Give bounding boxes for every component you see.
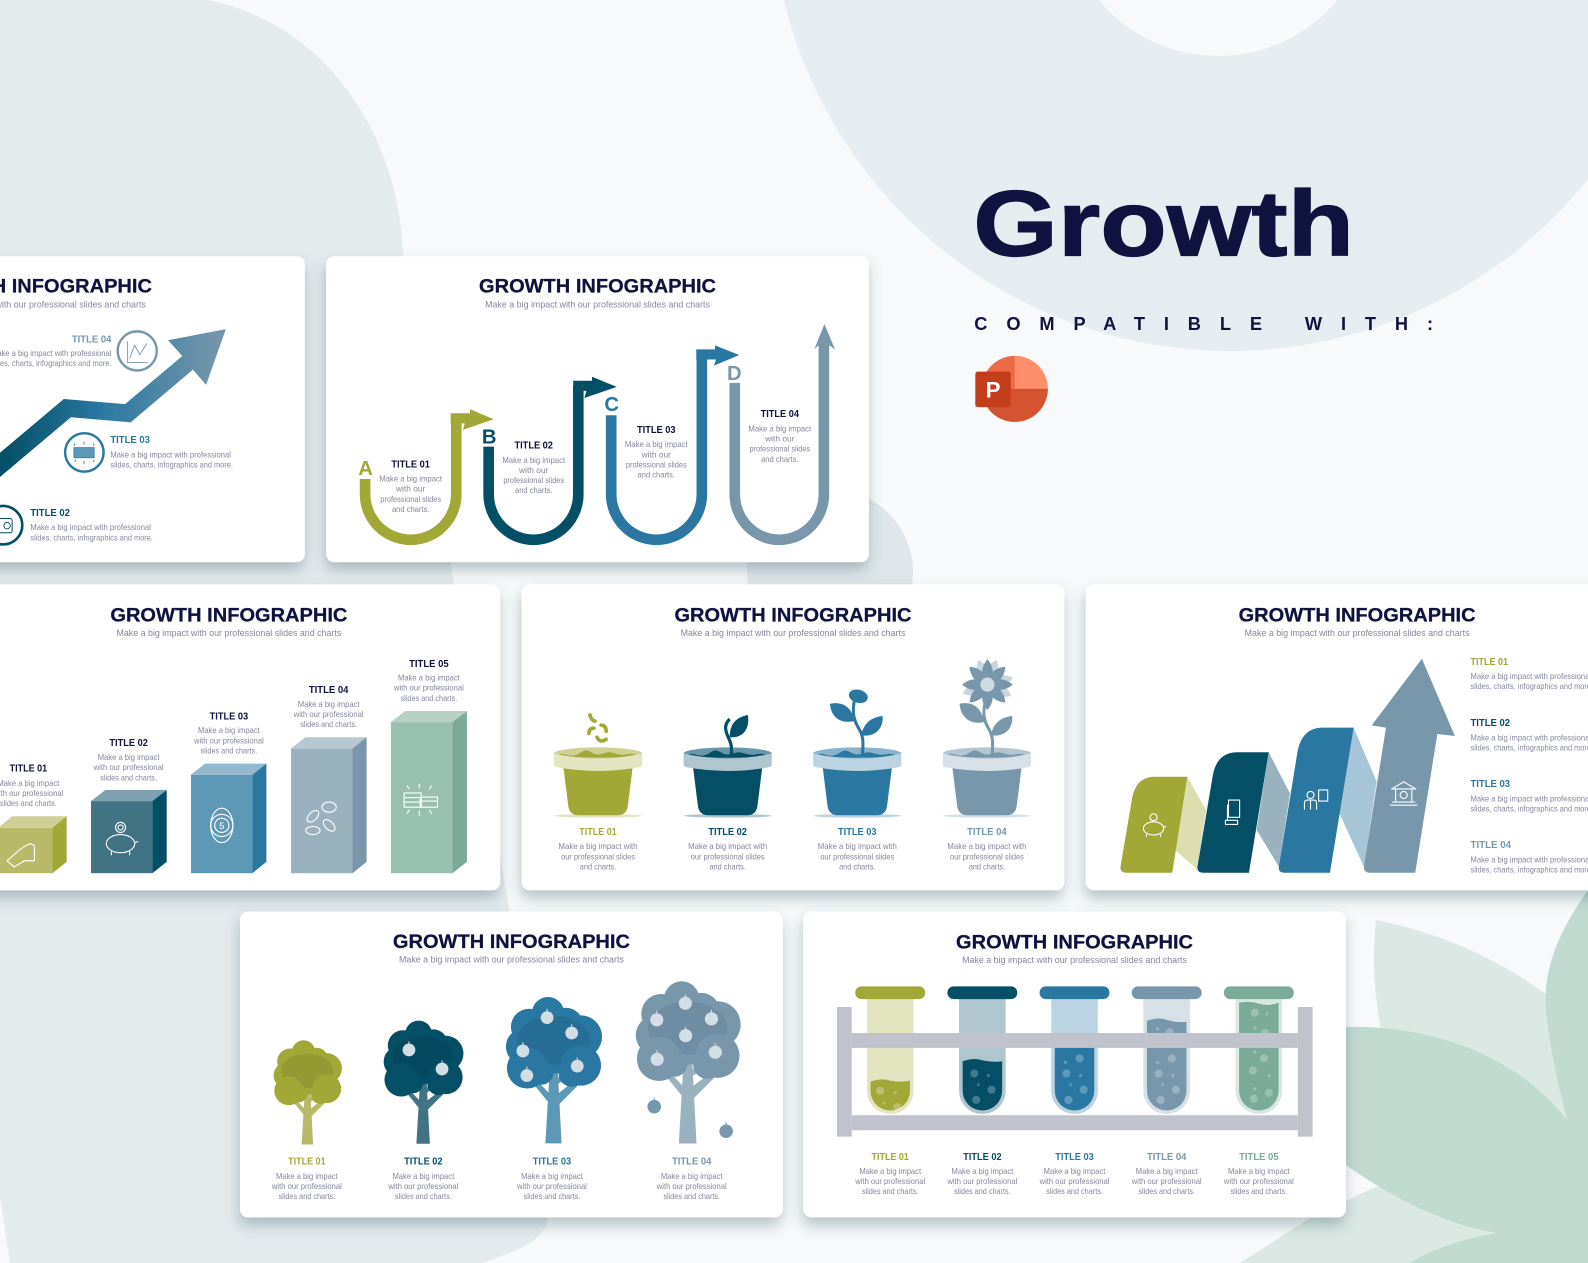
slide heading: GROWTH INFOGRAPHIC [479,277,716,298]
text: title 03: TITLE 03 [637,425,676,436]
text: title 02: TITLE 02 [514,441,553,452]
text: title 04: TITLE 04 [967,827,1007,838]
text: title 04: and charts. [969,862,1005,871]
text: title 03: Make a big impact [625,440,688,449]
text: title 02: slides and charts. [395,1192,452,1201]
text: title 04: TITLE 04 [1471,840,1511,851]
text: title 04: Make a big impact [298,700,360,709]
text: title 02: TITLE 02 [404,1157,443,1168]
text: title 03: with our professional [193,736,264,745]
text: title 02: Make a big impact [502,456,566,465]
text: title 01: slides and charts. [862,1187,919,1196]
text: title 02: with our professional [93,763,164,772]
heading: Growth: Growth [973,172,1354,276]
item: title 03: Make a big impact with professional [110,450,231,459]
panel: U-arrows slide [326,256,869,562]
text: title 03: slides and charts. [1046,1187,1103,1196]
text: title 01: with our professional [854,1177,925,1186]
text: title 04: Make a big impact [1136,1167,1198,1176]
arrow C [604,345,739,540]
text: title 03: TITLE 03 [838,827,877,838]
arrow A: A [358,458,373,480]
text: title 02: TITLE 02 [708,827,747,838]
text: title 02: TITLE 02 [1471,718,1510,729]
text: title 02: with our professional [946,1177,1018,1186]
text: title 02 [387,1157,458,1201]
tree 02 [384,1021,463,1144]
text: title 02 [1471,718,1588,752]
text: title 04 [748,409,812,464]
text: title 01: TITLE 01 [1471,657,1508,668]
text: title 02: TITLE 02 [963,1152,1002,1163]
slide subheading: Make a big impact with our professional slides and charts [1245,628,1470,639]
text: title 01: TITLE 01 [871,1152,909,1163]
ribbon folds [1175,728,1377,872]
text: title 01 [379,459,443,514]
text: title 01 [559,827,638,871]
text: title 03: TITLE 03 [533,1157,572,1168]
icon: presenter [1304,790,1328,809]
bar 03 [191,764,266,873]
text: title 04: and charts. [761,455,799,464]
tube 01 [855,986,925,1114]
tube 04 [1132,986,1202,1114]
text: title 04: with our professional [1131,1177,1202,1186]
icon: coin stack: 5 [219,821,224,831]
slide heading: GROWTH INFOGRAPHIC [674,605,912,626]
text: title 04: TITLE 04 [309,685,349,696]
pot 03: seedling [813,687,901,818]
text: title 04 [656,1157,727,1201]
text: title 04: Make a big impact with [947,842,1026,851]
text: title 02: professional slides [503,476,564,485]
text: title 01: Make a big impact with [559,842,638,851]
text: title 05: TITLE 05 [409,659,449,670]
text: title 03: Make a big impact with [818,842,897,851]
arrow B: B [482,427,496,449]
item: title 03 [65,433,233,472]
text: title 03: slides and charts. [524,1192,580,1201]
bar 01 [0,816,67,873]
text: title 04: Make a big impact [661,1172,723,1181]
text: title 04: with our [764,435,795,444]
text: title 02 [502,441,566,495]
text: title 01: slides and charts. [279,1192,335,1201]
text: title 01: our professional slides [561,852,635,861]
icon: coins [305,802,337,835]
text: title 02: and charts. [709,862,746,871]
text: title 05: slides and charts. [401,694,457,703]
slide heading: GROWTH INFOGRAPHIC [393,932,630,953]
item: title 04: TITLE 04 [72,334,112,345]
text: title 01 [0,764,63,808]
text: title 05 [1223,1152,1294,1196]
text: title 01: and charts. [580,862,616,871]
icon: PowerPoint logo [975,356,1048,422]
text: title 02 [93,738,164,782]
text: title 01: professional slides [380,495,441,504]
text: title 03: TITLE 03 [1055,1152,1094,1163]
item: title 03: TITLE 03 [110,435,150,446]
icon: PowerPoint logo: P [986,378,1001,403]
ribbon block 01 [1120,777,1187,873]
item: title 03: slides, charts, infographics and more. [110,460,233,469]
arrow D [727,324,835,540]
text: title 03: and charts. [839,862,876,871]
text: title 01: Make a big impact [859,1167,922,1176]
text: title 02 [688,827,767,871]
text: title 01: TITLE 01 [579,827,617,838]
falling apples [648,1098,732,1138]
text: title 02: Make a big impact with [688,842,767,851]
text: title 02: with our professional [387,1182,458,1191]
text: title 05: with our professional [393,684,464,693]
background leaves [1240,890,1588,1263]
arrow B [482,377,617,540]
text: title 04: with our professional [656,1182,727,1191]
panel: rising arrow slide [0,256,305,562]
text: title 01 [854,1152,925,1196]
text: title 03: Make a big impact [521,1172,584,1181]
text: title 03 [818,827,897,871]
tube 02 [947,986,1017,1114]
slide subheading: Make a big impact with our professional slides and charts [116,628,341,639]
text: title 02: and charts. [515,486,552,495]
text: title 05: Make a big impact [1228,1167,1290,1176]
tree 04 [636,981,741,1144]
text: title 03: and charts. [638,471,675,480]
text: title 01 [271,1157,342,1201]
apples on tree 02 [403,1041,448,1075]
background blob: left [0,0,548,1263]
text: title 03: TITLE 03 [1471,779,1510,790]
text: title 01: Make a big impact [379,475,443,484]
text: title 02: with our [518,466,549,475]
text: title 03: with our [641,450,671,459]
text: title 04 [1471,840,1588,874]
slide subheading: Make a big impact with our professional slides and charts [485,299,710,310]
text: title 02: Make a big impact [951,1167,1014,1176]
bar 02 [91,790,167,873]
arrow A [358,409,494,540]
text: title 03: with our professional [1039,1177,1110,1186]
text: title 02: Make a big impact [392,1172,455,1181]
text: title 01: slides and charts. [0,799,57,808]
text: title 05: slides and charts. [1231,1187,1287,1196]
bar 04 [291,737,367,873]
tree 01 [274,1040,342,1144]
text: title 04: our professional slides [950,852,1024,861]
background circle: top small [1063,0,1373,56]
text: title 03 [625,425,688,480]
text: title 02: Make a big impact [98,753,160,762]
ribbon arrow [1364,659,1455,873]
slide heading: GROWTH INFOGRAPHIC [956,932,1193,953]
item: title 02: slides, charts, infographics and more. [30,533,153,542]
text: title 01: Make a big impact [276,1172,338,1181]
text: title 03: Make a big impact [1044,1167,1106,1176]
text: title 02: slides and charts. [100,773,157,782]
background blob: behind arrow panel [747,489,913,655]
flower head [961,658,1014,710]
slide subheading: Make a big impact with our professional slides and charts [962,955,1187,966]
panel: test tubes slide [803,911,1346,1217]
arrow: rising zigzag [0,329,226,477]
slide subheading: Make a big impact with our professional slides and charts [681,628,906,639]
text: title 05: with our professional [1223,1177,1294,1186]
tube 03 [1040,986,1109,1114]
text: title 01: TITLE 01 [10,764,47,775]
text: title 04: slides and charts. [1138,1187,1195,1196]
text: title 01: TITLE 01 [391,459,430,470]
icon: money stacks [404,784,438,815]
text: title 02: slides and charts. [954,1187,1011,1196]
arrow D: D [727,363,742,385]
text: title 02 [946,1152,1018,1196]
text: title 04: TITLE 04 [1147,1152,1187,1163]
icon: piggy bank [1143,814,1166,837]
text: title 03 [516,1157,587,1201]
text: title 04 [293,685,364,729]
background circle: top right [771,0,1588,351]
panel: folded ribbon arrow slide [1086,584,1588,890]
text: title 05 [393,659,464,703]
slide heading: GROWTH INFOGRAPHIC [1239,605,1476,626]
icon: card in hand [1225,800,1240,824]
apples on tree 03 [517,1009,583,1081]
text: title 02: our professional slides [691,852,765,861]
text: title 04 [1131,1152,1202,1196]
text: title 04 [947,827,1026,871]
text: title 04: Make a big impact [748,424,812,433]
text: title 04: with our professional [293,710,364,719]
pot 02: sprout [684,715,772,818]
text: title 04: TITLE 04 [672,1157,712,1168]
text: title 03 [1471,779,1588,814]
panel: trees slide [240,911,783,1217]
icon: bank building [1391,782,1417,805]
text: title 01: and charts. [392,505,429,514]
text: title 03: TITLE 03 [210,712,248,723]
slide heading: GROWTH INFOGRAPHIC [110,605,347,626]
ribbon block 03 [1279,728,1354,873]
arrow C: C [604,394,619,416]
text: title 05: TITLE 05 [1239,1152,1279,1163]
bar 05 [391,711,467,873]
slide subheading: Make a big impact with our professional slides and charts [399,955,624,966]
pot 04: flower [943,658,1031,818]
text: title 04: TITLE 04 [761,409,799,420]
item: title 02 [0,506,153,544]
text: title 01 [1471,657,1588,691]
text: title 02: TITLE 02 [109,738,148,749]
tube 05 [1224,986,1294,1114]
text: title 05: Make a big impact [398,674,460,683]
panel: flower pots slide [522,584,1064,890]
ribbon block 02 [1197,752,1269,873]
text: title 01: TITLE 01 [288,1157,326,1168]
item: title 04 [0,331,157,370]
item: title 02: TITLE 02 [30,508,70,519]
item: title 02: Make a big impact with professional [30,523,151,532]
text: title 01: with our [395,485,426,494]
text: title 04: slides and charts. [300,720,357,729]
text: title 03: our professional slides [820,852,894,861]
text: title 03: with our professional [516,1182,587,1191]
subheading: compatible with: COMPATIBLE WITH: [974,314,1433,334]
text: title 04: slides and charts. [663,1192,720,1201]
text: title 03: Make a big impact [198,726,260,735]
text: title 01: with our professional [271,1182,342,1191]
icon: piggy bank [106,822,138,855]
text: title 03: professional slides [626,460,687,469]
text: title 03 [193,712,264,755]
text: title 04: professional slides [749,445,810,454]
test tube rack [837,1007,1313,1137]
pot 01: seeds [554,715,642,818]
apples on tree 04 [651,995,721,1065]
panel: 3D bars slide [0,584,500,890]
text: title 03 [1039,1152,1110,1196]
tree 03 [506,997,602,1143]
text: title 03: slides and charts. [201,746,257,755]
